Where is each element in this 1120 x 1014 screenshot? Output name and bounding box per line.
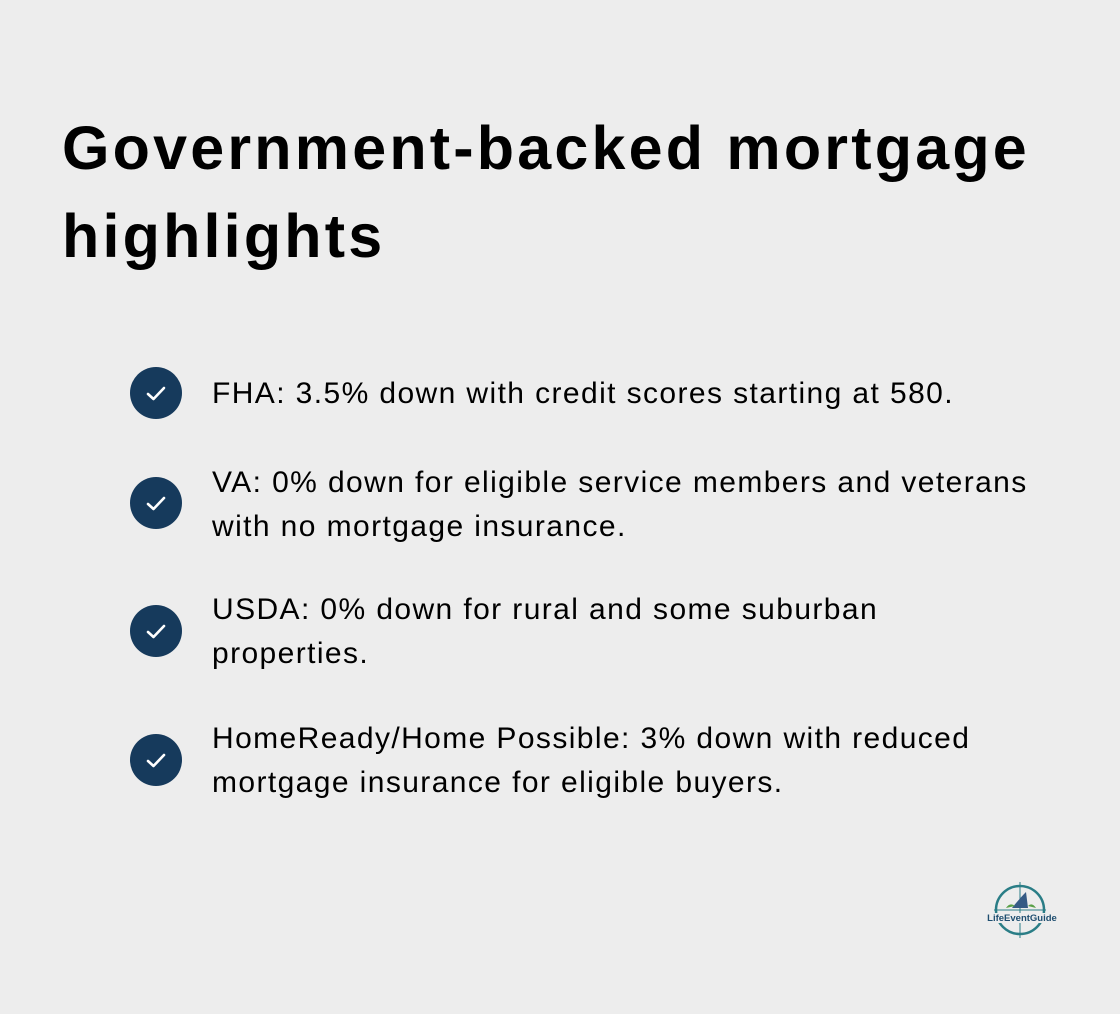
text: HomeReady: HomeReady/Home Possible: 3% down with reduced [212,722,970,755]
text: USDA [212,593,878,670]
title: highlights [62,202,385,270]
text: HomeReady: mortgage insurance for eligible buyers. [212,766,784,799]
text: VA: VA: 0% down for eligible service members and veterans [212,466,1028,499]
text: USDA: USDA: 0% down for rural and some suburban [212,593,878,626]
logo: LifeEventGuide [987,913,1057,924]
text: HomeReady [212,722,970,799]
icon: check [130,734,182,786]
item: HomeReady [130,722,970,799]
text: USDA: properties. [212,637,369,670]
title: Government-backed mortgage [62,114,1030,182]
item: FHA [130,367,954,419]
icon: check [130,605,182,657]
logo [987,882,1057,938]
icon: check [130,367,182,419]
item: VA [130,466,1028,543]
item: USDA [130,593,878,670]
title [62,114,1030,270]
text: VA [212,466,1028,543]
text: VA: with no mortgage insurance. [212,510,627,543]
text: FHA: FHA: 3.5% down with credit scores starting at 580. [212,377,954,410]
icon: check [130,477,182,529]
